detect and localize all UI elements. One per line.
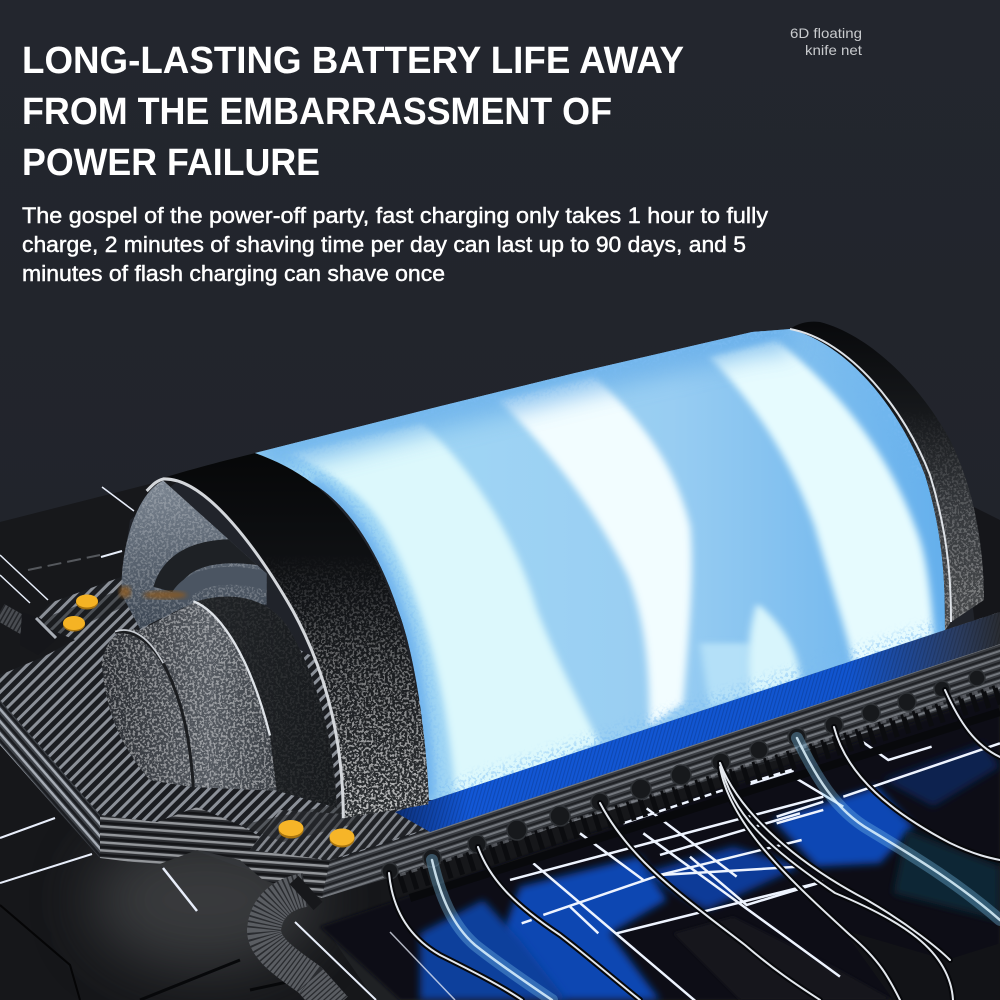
headline: FROM THE EMBARRASSMENT OF (22, 91, 612, 133)
callout: 6D floating knife net: 6D floating (790, 25, 862, 41)
black cables (389, 690, 1000, 1000)
rear disc of shaver head (122, 480, 267, 629)
socket holes on platform edge (382, 670, 985, 879)
white circuit lines (510, 740, 1000, 1000)
headline (22, 40, 684, 184)
callout: 6D floating knife net (790, 25, 862, 58)
body description (22, 203, 768, 286)
left end cap band (147, 450, 440, 820)
chevron teeth under platform (400, 685, 1000, 898)
body description: charge, 2 minutes of shaving time per day can last up to 90 days, and 5 (22, 232, 746, 257)
left floor lines (0, 487, 455, 1000)
ground plates (0, 475, 1000, 1000)
charging platform: side faces (0, 644, 1000, 898)
charging platform: ribbed top (0, 570, 1000, 860)
translucent glowing cables (432, 738, 1000, 1000)
headline: POWER FAILURE (22, 142, 320, 184)
body description: The gospel of the power-off party, fast charging only takes 1 hour to fully (22, 203, 768, 228)
left cable connector (0, 612, 56, 655)
glowing battery cylinder (240, 320, 960, 810)
yellow buttons (63, 594, 354, 848)
callout: 6D floating knife net: knife net (805, 42, 862, 58)
right end cap band (785, 318, 990, 633)
blue glow on ground (320, 693, 1000, 1000)
frost and white bands (288, 340, 934, 810)
ribbed power hose (264, 880, 335, 1000)
small floating cutter heads (95, 586, 345, 810)
body description: minutes of flash charging can shave once (22, 261, 445, 286)
blue lit strip (395, 612, 1000, 832)
headline: LONG-LASTING BATTERY LIFE AWAY (22, 40, 684, 82)
